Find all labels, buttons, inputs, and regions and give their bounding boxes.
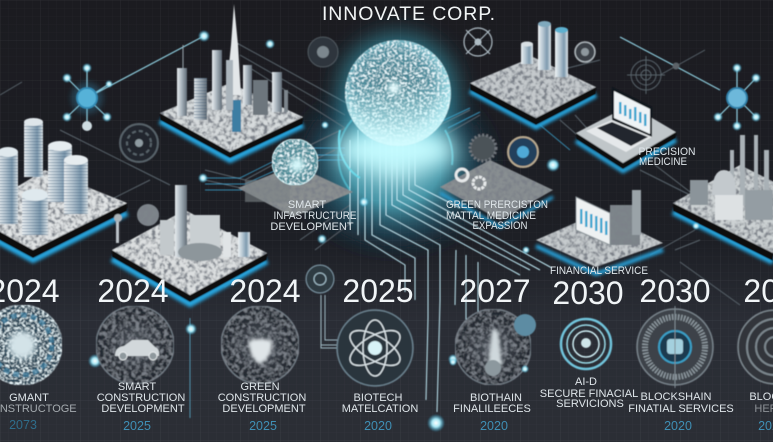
caption 5 — [453, 392, 531, 433]
icon: crossed ring — [464, 28, 492, 56]
billboard — [576, 190, 641, 245]
caption 2: SMART — [118, 381, 156, 393]
timeline years: 2030 — [552, 275, 624, 311]
central glow — [280, 65, 510, 265]
platform: green materials — [440, 135, 559, 227]
caption 6 — [540, 376, 638, 410]
caption 2: CONSTRUCTION — [97, 392, 185, 404]
timeline captions — [0, 376, 773, 433]
platform: city skyline — [160, 4, 303, 160]
caption 2 — [97, 381, 185, 433]
caption 4: MATELCATION — [342, 403, 418, 415]
glass globe — [272, 139, 318, 185]
timeline small disc connector icon — [306, 265, 334, 293]
sphere ring arcs — [338, 120, 452, 190]
caption 7 — [628, 391, 734, 433]
timeline disc 5 — [449, 309, 536, 385]
label: precision medicine: MEDICINE — [639, 156, 687, 168]
caption 3: 2025 — [249, 419, 277, 433]
cylinders — [0, 118, 88, 235]
timeline years: 2030 — [639, 273, 711, 309]
label: precision medicine: PRECISION — [638, 146, 696, 158]
caption 1: 2073 — [9, 418, 37, 432]
label: green precision: GREEN PRERCISTON — [446, 199, 548, 211]
glowing nodes — [88, 121, 560, 432]
label: green precision: MATTAL MEDICINE — [446, 210, 536, 222]
caption 4: 2020 — [364, 419, 392, 433]
caption 5: 2020 — [480, 419, 508, 433]
caption 3: DEVELOPMENT — [222, 403, 306, 415]
label: precision medicine — [638, 146, 696, 168]
timeline disc 3: shield — [221, 306, 299, 384]
timeline years: 2024 — [97, 273, 169, 309]
refinery — [690, 135, 773, 220]
label: smart infrastructure — [270, 199, 356, 233]
platform: industrial city — [112, 185, 267, 304]
label: green precision — [446, 199, 548, 232]
timeline years: 2024 — [229, 273, 301, 309]
label: financial service: FINANCIAL SERVICE — [550, 265, 648, 277]
caption 8 — [749, 391, 773, 433]
label: smart infrastructure: INFASTRUCTURE — [274, 210, 356, 222]
caption 1 — [0, 392, 77, 432]
caption 1: GMANT — [9, 392, 49, 404]
caption 2: DEVELOPMENT — [101, 403, 185, 415]
right network node — [620, 37, 761, 131]
circuit lines behind panels — [0, 42, 740, 305]
label: green precision: EXPASSION — [472, 220, 528, 232]
caption 7: BLOCKSHAIN — [641, 391, 712, 403]
circuit lines from sphere to timeline — [190, 130, 552, 418]
timeline disc 1 — [0, 305, 62, 385]
platform: smart infrastructure — [238, 139, 353, 217]
caption 6: SERVICIONS — [556, 398, 624, 410]
caption 2: 2025 — [123, 419, 151, 433]
timeline disc 7 — [637, 306, 713, 388]
chimneys — [521, 21, 595, 77]
caption 4 — [342, 392, 418, 433]
caption 6: SECURE FINACIAL — [540, 388, 638, 400]
central data sphere — [336, 33, 458, 172]
caption 3 — [218, 381, 306, 433]
platform: right city — [673, 135, 773, 262]
structures — [114, 185, 250, 261]
label: smart infrastructure: DEVELOPMENT — [270, 221, 354, 233]
gears and lens — [456, 135, 559, 189]
timeline years: 2025 — [342, 273, 414, 309]
icon: top disc — [265, 37, 338, 67]
timeline years: 2027 — [459, 273, 531, 309]
left network node — [62, 30, 210, 131]
caption 7: 2020 — [664, 419, 692, 433]
platform: cylinder towers — [0, 118, 127, 260]
caption 7: FINATIAL SERVICES — [628, 403, 734, 415]
caption 3: CONSTRUCTION — [218, 392, 306, 404]
caption 6: AI-D — [575, 376, 597, 388]
caption 5: BIOTHAIN — [470, 392, 522, 404]
caption 4: BIOTECH — [354, 392, 402, 404]
timeline years — [0, 273, 773, 311]
title: INNOVATE CORP. — [322, 3, 495, 25]
timeline disc 4: atom — [337, 310, 413, 386]
caption 3: GREEN — [240, 381, 280, 393]
label: smart infrastructure: SMART — [288, 199, 326, 211]
timeline disc 6 — [561, 319, 611, 369]
platform: factory — [470, 21, 596, 127]
icon: dark gear left — [120, 124, 158, 162]
caption 5: FINALILEECES — [453, 403, 531, 415]
laptop — [586, 87, 652, 152]
towers — [177, 4, 288, 132]
icon: radar — [627, 56, 665, 94]
timeline disc 8 — [738, 310, 773, 384]
platform: laptop — [576, 87, 676, 171]
timeline disc 2: car — [96, 306, 174, 384]
platform: financial — [536, 190, 663, 274]
